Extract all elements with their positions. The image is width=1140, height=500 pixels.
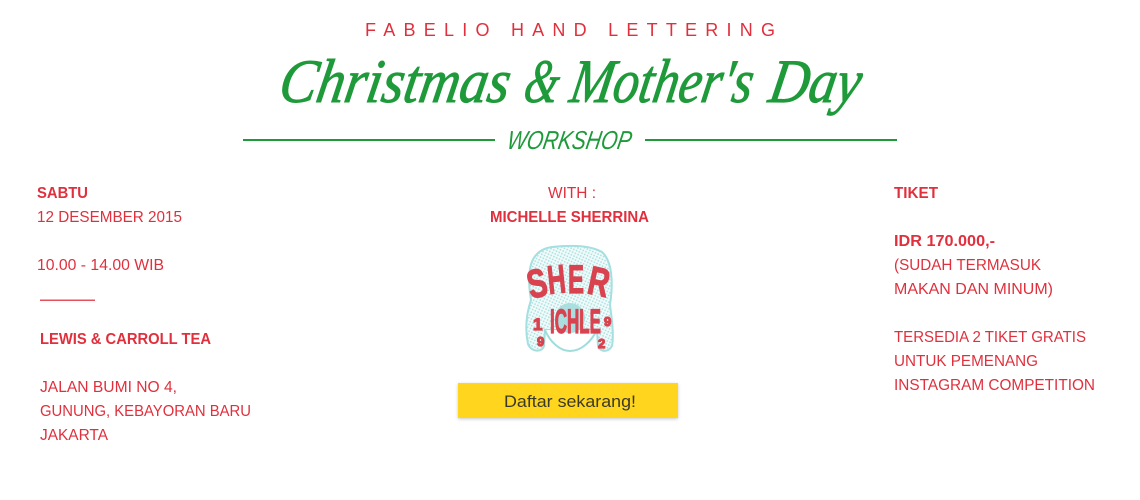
script title: &	[520, 46, 566, 116]
icon: Sherchle logo: S	[522, 260, 552, 308]
right column: ticket	[894, 185, 1095, 394]
icon: Sherchle logo: ICHLE	[550, 303, 601, 341]
right column: ticket: TIKET	[894, 185, 939, 202]
instructor name: WITH :	[548, 185, 596, 202]
header	[243, 20, 897, 155]
free tickets note: INSTAGRAM COMPETITION	[894, 377, 1095, 394]
button: Daftar sekarang: Daftar sekarang!	[504, 392, 636, 411]
venue	[40, 331, 251, 444]
center column: instructor	[458, 185, 678, 418]
date and time	[37, 185, 182, 274]
venue: JAKARTA	[40, 427, 109, 444]
price	[894, 233, 1053, 298]
instructor name: MICHELLE SHERRINA	[490, 209, 649, 226]
date and time: 10.00 - 14.00 WIB	[37, 257, 164, 274]
eyebrow title: FABELIO HAND LETTERING	[365, 20, 775, 40]
button: Daftar sekarang	[458, 383, 678, 418]
script title	[275, 46, 868, 116]
date and time: 12 DESEMBER 2015	[37, 209, 182, 226]
icon: Sherchle logo: E	[568, 257, 584, 301]
price: MAKAN DAN MINUM)	[894, 281, 1053, 298]
price: IDR 170.000,-	[894, 233, 995, 250]
free tickets note: UNTUK PEMENANG	[894, 353, 1038, 370]
icon: Sherchle logo: 9	[604, 314, 611, 329]
icon: Sherchle logo: 1	[533, 315, 542, 334]
workshop subtitle with rules: WORKSHOP	[505, 125, 635, 155]
date and time: SABTU	[37, 185, 88, 202]
script title: Day	[764, 46, 868, 116]
icon: Sherchle logo: R	[584, 258, 614, 306]
icon: Sherchle logo: 2	[598, 336, 605, 351]
venue: GUNUNG, KEBAYORAN BARU	[40, 403, 251, 420]
free tickets note	[894, 329, 1095, 394]
price: (SUDAH TERMASUK	[894, 257, 1042, 274]
venue: JALAN BUMI NO 4,	[40, 379, 177, 396]
script title: Christmas	[275, 46, 517, 116]
icon: Sherchle logo: H	[545, 257, 568, 304]
instructor name	[490, 185, 649, 226]
left column: date and venue	[37, 185, 251, 444]
script title: Mother's	[565, 46, 760, 116]
icon: Sherchle logo	[522, 246, 614, 351]
free tickets note: TERSEDIA 2 TIKET GRATIS	[894, 329, 1086, 346]
venue: LEWIS & CARROLL TEA	[40, 331, 211, 348]
icon: Sherchle logo: 9	[537, 334, 544, 349]
